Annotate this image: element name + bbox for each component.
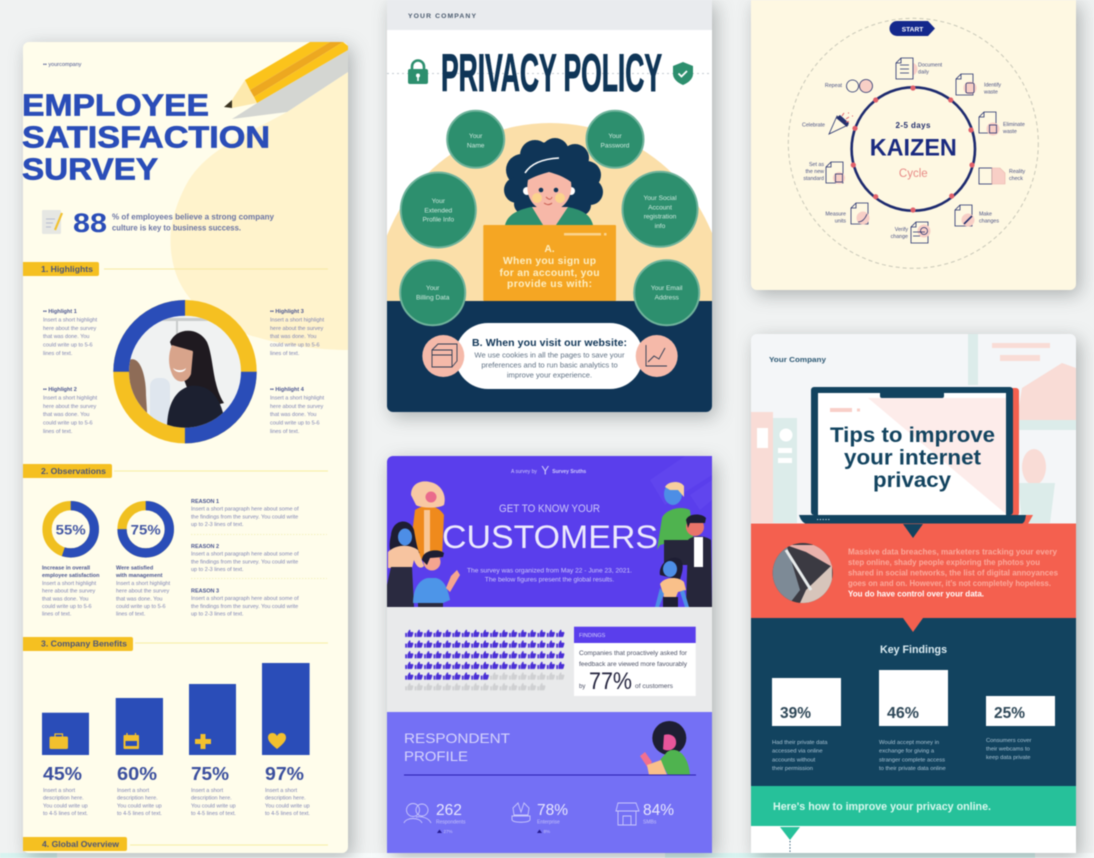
heading: global overview: 4. Global Overview xyxy=(42,839,119,849)
reason 1: up to 2-3 lines of text. xyxy=(191,522,244,528)
heading: customers: CUSTOMERS xyxy=(442,519,658,555)
benefit descriptions: description here. xyxy=(117,796,158,802)
step: set as the new standard xyxy=(803,162,845,184)
bubble labels: Password xyxy=(601,142,630,149)
center text: Cycle xyxy=(899,168,928,180)
benefit descriptions: to 4-5 lines of text. xyxy=(191,811,236,817)
bubble labels: Extended xyxy=(424,207,453,214)
step: measure units: Measure xyxy=(825,212,846,218)
bubble labels: Your Email xyxy=(651,285,683,292)
donut caption 2: could write up to 5-6 xyxy=(116,604,166,610)
stat: SMBs: SMBs xyxy=(643,820,657,826)
pictogram: thumbs up grid xyxy=(404,628,564,692)
title: your internet xyxy=(844,446,981,470)
coral intro section xyxy=(751,524,1076,618)
finding 25 percent: 25% xyxy=(994,705,1025,722)
bubble labels: Account xyxy=(648,204,672,211)
survey credit: A survey by xyxy=(511,469,537,475)
photo: phone in hand xyxy=(772,543,834,603)
donut caption 2: lines of text. xyxy=(116,612,146,618)
company label: Your Company xyxy=(769,357,826,364)
step: verify change xyxy=(891,222,930,243)
donut caption 2: Were satisfied xyxy=(116,566,153,572)
background decor xyxy=(751,334,1076,523)
highlight 4: lines of text. xyxy=(270,429,300,435)
survey credit: Survey Sruths xyxy=(552,469,586,475)
benefit percentages: 60% xyxy=(117,764,157,784)
intro paragraph: shared in social networks, the list of digital annoyances xyxy=(848,568,1058,578)
title: SURVEY xyxy=(22,152,158,186)
callout A xyxy=(483,225,616,301)
bubble labels: Your xyxy=(426,285,439,292)
finding 39 percent: their permission xyxy=(772,766,813,772)
highlight 3: •• Highlight 3 xyxy=(270,309,304,315)
benefit descriptions: Insert a short xyxy=(191,788,224,794)
findings card: of customers xyxy=(635,684,673,690)
stat: respondents xyxy=(404,802,466,834)
donut: 55 percent xyxy=(47,506,94,553)
step: measure units: units xyxy=(835,218,846,224)
callout B xyxy=(455,323,643,389)
finding 39 percent: Had their private data xyxy=(772,740,827,746)
benefit descriptions: description here. xyxy=(43,796,84,802)
reason 3: the findings from the survey. You could write xyxy=(191,604,298,610)
benefit descriptions: You could write up xyxy=(191,803,236,809)
company bar: YOUR COMPANY xyxy=(408,13,476,20)
intro paragraph: You do have control over your data. xyxy=(848,590,984,598)
illustration: person with afro xyxy=(640,721,690,775)
statistic: 88 percent: culture is key to business success. xyxy=(112,224,241,232)
intro paragraph: Massive data breaches, marketers tracking your every xyxy=(848,548,1057,556)
step: eliminate waste: Eliminate xyxy=(1003,122,1025,128)
illustration: laptop xyxy=(799,387,1033,524)
finding 39 percent: accessed via online xyxy=(772,749,823,755)
highlight 2: here about the survey xyxy=(43,404,96,410)
finding 25 percent xyxy=(986,696,1055,761)
cycle ring xyxy=(851,85,975,213)
step: repeat: Repeat xyxy=(825,83,843,89)
background blob xyxy=(171,72,348,350)
title: SATISFACTION xyxy=(22,120,270,154)
highlight 3: here about the survey xyxy=(270,326,323,332)
highlight 2: that was done. You xyxy=(43,412,89,418)
bubble labels: Your xyxy=(432,198,445,205)
highlight 1: •• Highlight 1 xyxy=(43,309,77,315)
step: set as the new standard: the new xyxy=(805,169,824,175)
step: identify waste: Identify xyxy=(984,82,1001,88)
stat: SMBs: 84% xyxy=(643,802,674,819)
bubble labels: info xyxy=(655,223,666,230)
reason 2: Insert a short paragraph here about some of xyxy=(191,552,299,558)
heading: observations: 2. Observations xyxy=(41,466,106,476)
heading: GET TO KNOW YOUR xyxy=(499,503,600,515)
title: Tips to improve xyxy=(830,423,995,447)
benefit descriptions: Insert a short xyxy=(117,788,150,794)
donut caption 1: here about the survey xyxy=(42,589,95,595)
step: set as the new standard: Set as xyxy=(809,162,824,168)
bar 97 percent with heart icon xyxy=(262,663,310,755)
bubble labels: Your xyxy=(608,133,622,140)
step: identify waste: waste xyxy=(984,90,998,96)
heading: company benefits xyxy=(23,637,328,651)
center text: KAIZEN xyxy=(870,134,957,162)
statistic: 88 percent: % of employees believe a strong company xyxy=(112,212,274,222)
benefit percentages: 97% xyxy=(265,764,304,784)
finding 46 percent: to their private data online xyxy=(879,766,946,772)
bubble labels: Name xyxy=(467,142,485,149)
reason 3: Insert a short paragraph here about some of xyxy=(191,596,299,602)
donut caption 1: lines of text. xyxy=(42,612,72,618)
heading: respondent profile xyxy=(404,730,510,764)
callout B: improve your experience. xyxy=(507,370,592,380)
highlight 2: could write up to 5-6 xyxy=(43,421,93,427)
bar 60 percent with calendar icon xyxy=(116,698,163,755)
bubble labels: Profile Info xyxy=(423,217,454,224)
icon: line chart xyxy=(636,335,678,377)
green banner: Here's how to improve your privacy online. xyxy=(773,801,991,813)
heading: respondent profile: RESPONDENT xyxy=(404,730,510,746)
company bar xyxy=(387,0,712,30)
respondent section xyxy=(387,712,712,853)
highlight 2: Insert a short highlight xyxy=(43,395,98,401)
benefit descriptions: Insert a short xyxy=(43,788,76,794)
step: verify change: change xyxy=(891,234,908,240)
benefit descriptions: description here. xyxy=(265,796,306,802)
findings card xyxy=(574,627,696,696)
statistic: 88 percent: 88 xyxy=(73,208,107,238)
donut caption 1: Increase in overall xyxy=(42,566,90,572)
finding 25 percent: their webcams to xyxy=(986,747,1030,753)
finding 39 percent: 39% xyxy=(780,705,811,722)
highlight 1: Insert a short highlight xyxy=(43,317,98,323)
heading: observations xyxy=(23,464,328,478)
findings card: feedback are viewed more favourably xyxy=(579,662,687,668)
step: celebrate: Celebrate xyxy=(802,122,825,128)
finding 46 percent: Would accept money in xyxy=(879,740,939,746)
finding 39 percent: accounts without xyxy=(772,757,816,763)
benefit descriptions: to 4-5 lines of text. xyxy=(117,811,162,817)
callout A: for an account, you xyxy=(500,268,600,279)
illustration: people right xyxy=(655,482,712,607)
heading: highlights xyxy=(23,262,328,276)
donut: 75 percent xyxy=(122,506,169,553)
purple header xyxy=(387,456,712,607)
company label: •• yourcompany xyxy=(43,62,82,68)
step: document daily xyxy=(896,58,943,79)
benefit descriptions: to 4-5 lines of text. xyxy=(265,811,310,817)
finding 25 percent: keep data private xyxy=(986,755,1030,761)
callout B: B. When you visit our website: xyxy=(472,337,627,349)
benefit percentages: 75% xyxy=(191,764,229,784)
bubble labels: Your xyxy=(469,133,482,140)
stat: enterprise: 78% xyxy=(537,802,568,819)
callout B: We use cookies in all the pages to save your xyxy=(474,350,625,360)
findings card: Companies that proactively asked for xyxy=(579,651,687,657)
finding 46 percent xyxy=(879,670,948,772)
step: celebrate xyxy=(802,113,853,134)
step: reality check: check xyxy=(1009,176,1023,182)
bar chart: company benefits xyxy=(42,663,310,755)
heading: respondent profile: PROFILE xyxy=(404,748,468,764)
reason 1: Insert a short paragraph here about some of xyxy=(191,507,299,513)
bubble labels xyxy=(416,133,683,301)
callout B: preferences and to run basic analytics to xyxy=(481,360,618,370)
donut: 75 percent: 75% xyxy=(131,522,161,538)
panel: get to know your customers xyxy=(387,456,712,853)
donut caption 2: here about the survey xyxy=(116,589,169,595)
callout A: A. xyxy=(544,244,555,255)
highlight 3: Insert a short highlight xyxy=(270,317,325,323)
dashed outer ring xyxy=(788,18,1038,268)
stat: enterprise: Enterprise xyxy=(537,820,560,826)
donut caption 1: employee satisfaction xyxy=(42,573,100,579)
stat: enterprise xyxy=(512,802,568,834)
step: eliminate waste: waste xyxy=(1003,129,1017,135)
title: privacy xyxy=(873,468,951,492)
benefit descriptions: You could write up xyxy=(117,803,162,809)
step: measure units xyxy=(825,203,870,224)
highlight 1: lines of text. xyxy=(43,351,73,357)
donut caption 1: could write up to 5-6 xyxy=(42,604,92,610)
highlight 4: that was done. You xyxy=(270,412,316,418)
bottom strip of background xyxy=(0,853,1094,858)
findings card: 77% xyxy=(589,668,632,695)
icon: browser window xyxy=(422,335,464,377)
highlight 4: •• Highlight 4 xyxy=(270,387,305,393)
semicircle backdrop xyxy=(386,122,712,302)
benefit descriptions: Insert a short xyxy=(265,788,298,794)
highlight 2: •• Highlight 2 xyxy=(43,387,77,393)
callout A: provide us with: xyxy=(507,279,592,290)
start badge xyxy=(890,21,935,36)
bar 75 percent with plus icon xyxy=(189,684,236,755)
reason 1: the findings from the survey. You could write xyxy=(191,514,298,520)
donut caption 1: that was done. You xyxy=(42,596,88,602)
panel: kaizen cycle xyxy=(751,0,1076,290)
key findings section: Key Findings xyxy=(880,644,947,656)
benefit percentages: 45% xyxy=(43,764,82,784)
green banner xyxy=(751,786,1076,826)
benefit descriptions: You could write up xyxy=(43,803,88,809)
reason 3: REASON 3 xyxy=(191,588,219,594)
benefit descriptions: You could write up xyxy=(265,803,310,809)
highlight 3: that was done. You xyxy=(270,334,316,340)
step: make changes: Make xyxy=(979,212,992,218)
benefit descriptions: to 4-5 lines of text. xyxy=(43,811,88,817)
highlight 1: here about the survey xyxy=(43,326,96,332)
highlight 4: could write up to 5-6 xyxy=(270,421,320,427)
stat: respondents: 262 xyxy=(436,802,462,819)
white footer with arrow xyxy=(751,826,1076,853)
reason 2: the findings from the survey. You could write xyxy=(191,559,298,565)
start badge: START xyxy=(902,26,923,34)
heading: company benefits: 3. Company Benefits xyxy=(41,638,127,648)
stat: respondents: Respondents xyxy=(436,820,466,826)
finding 46 percent: stranger complete access xyxy=(879,757,945,763)
title xyxy=(830,423,995,492)
step: document daily: Document xyxy=(918,62,942,68)
highlight 1: could write up to 5-6 xyxy=(43,343,93,349)
icon: shield check xyxy=(673,62,693,85)
benefit descriptions: description here. xyxy=(191,796,232,802)
stat: respondents: 27% xyxy=(444,829,453,834)
benefit percentages xyxy=(43,764,304,784)
step: set as the new standard: standard xyxy=(803,176,824,182)
highlight 1: that was done. You xyxy=(43,334,89,340)
intro paragraph xyxy=(848,548,1058,598)
stat: enterprise: 8% xyxy=(544,829,550,834)
subtitle: The below figures present the global results. xyxy=(485,576,614,584)
step: document daily: daily xyxy=(918,70,929,76)
subtitle xyxy=(467,568,632,584)
benefit descriptions xyxy=(43,788,310,817)
reason 2: REASON 2 xyxy=(191,544,219,550)
donut caption 2: with management xyxy=(115,573,163,579)
findings card: by xyxy=(579,684,585,690)
title xyxy=(22,88,270,186)
title: EMPLOYEE xyxy=(22,88,209,122)
heading: global overview xyxy=(23,837,328,851)
illustration: woman xyxy=(504,138,603,225)
step: make changes: changes xyxy=(979,218,999,224)
step: make changes xyxy=(955,205,999,226)
intro paragraph: step online, shady people exploring the photos you xyxy=(848,558,1040,567)
bubble labels: registration xyxy=(644,214,677,221)
icon: pencil xyxy=(224,42,348,119)
icon: padlock xyxy=(408,61,428,84)
center text: 2-5 days xyxy=(896,121,931,130)
highlight 3: could write up to 5-6 xyxy=(270,343,320,349)
step: verify change: Verify xyxy=(895,227,908,233)
highlight 4: here about the survey xyxy=(270,404,323,410)
finding 46 percent: 46% xyxy=(887,705,919,722)
reason 1: REASON 1 xyxy=(191,499,219,505)
highlight 2: lines of text. xyxy=(43,429,73,435)
step: reality check xyxy=(979,168,1026,184)
panel: employee satisfaction survey xyxy=(22,42,348,853)
donut: 55 percent: 55% xyxy=(56,522,86,538)
bubble labels: Address xyxy=(655,294,679,301)
highlight 4: Insert a short highlight xyxy=(270,395,325,401)
donut caption 1: Insert a short highlight xyxy=(42,581,97,587)
statistic: 88 percent xyxy=(73,208,274,238)
findings card: FINDINGS xyxy=(579,633,606,639)
panel: internet privacy tips xyxy=(751,334,1076,853)
survey credit: Y xyxy=(541,464,549,478)
illustration: people left xyxy=(387,481,460,607)
navy section xyxy=(387,301,712,412)
center text xyxy=(870,121,957,180)
stat: SMBs xyxy=(616,802,674,826)
info bubbles xyxy=(400,111,699,325)
photo ring xyxy=(121,308,249,435)
finding 25 percent: Consumers cover xyxy=(986,738,1031,744)
reason 3: up to 2-3 lines of text. xyxy=(191,612,244,618)
bubble labels: Your Social xyxy=(643,195,677,202)
heading: highlights: 1. Highlights xyxy=(41,264,93,274)
key findings section xyxy=(751,618,1076,786)
callout A: When you sign up xyxy=(503,256,596,267)
finding 46 percent: exchange for giving a xyxy=(879,749,935,755)
panel: privacy policy xyxy=(380,0,726,428)
step: reality check: Reality xyxy=(1009,169,1025,175)
donut caption 2: Insert a short highlight xyxy=(116,581,171,587)
step: identify waste xyxy=(956,74,1001,96)
step: repeat xyxy=(825,80,872,92)
subtitle: The survey was organized from May 22 - June 23, 2021. xyxy=(467,568,632,574)
highlight 3: lines of text. xyxy=(270,351,300,357)
reason 2: up to 2-3 lines of text. xyxy=(191,567,244,573)
bubble labels: Billing Data xyxy=(416,294,450,301)
intro paragraph: goes on and on. However, it’s not completely hopeless. xyxy=(848,579,1051,588)
finding 39 percent xyxy=(772,678,841,772)
step: eliminate waste xyxy=(979,112,1025,136)
bar 45 percent with briefcase icon xyxy=(42,713,89,755)
panel: privacy policy: PRIVACY POLICY xyxy=(441,44,662,103)
donut caption 2: that was done. You xyxy=(116,596,162,602)
icon: clipboard note xyxy=(42,210,62,234)
